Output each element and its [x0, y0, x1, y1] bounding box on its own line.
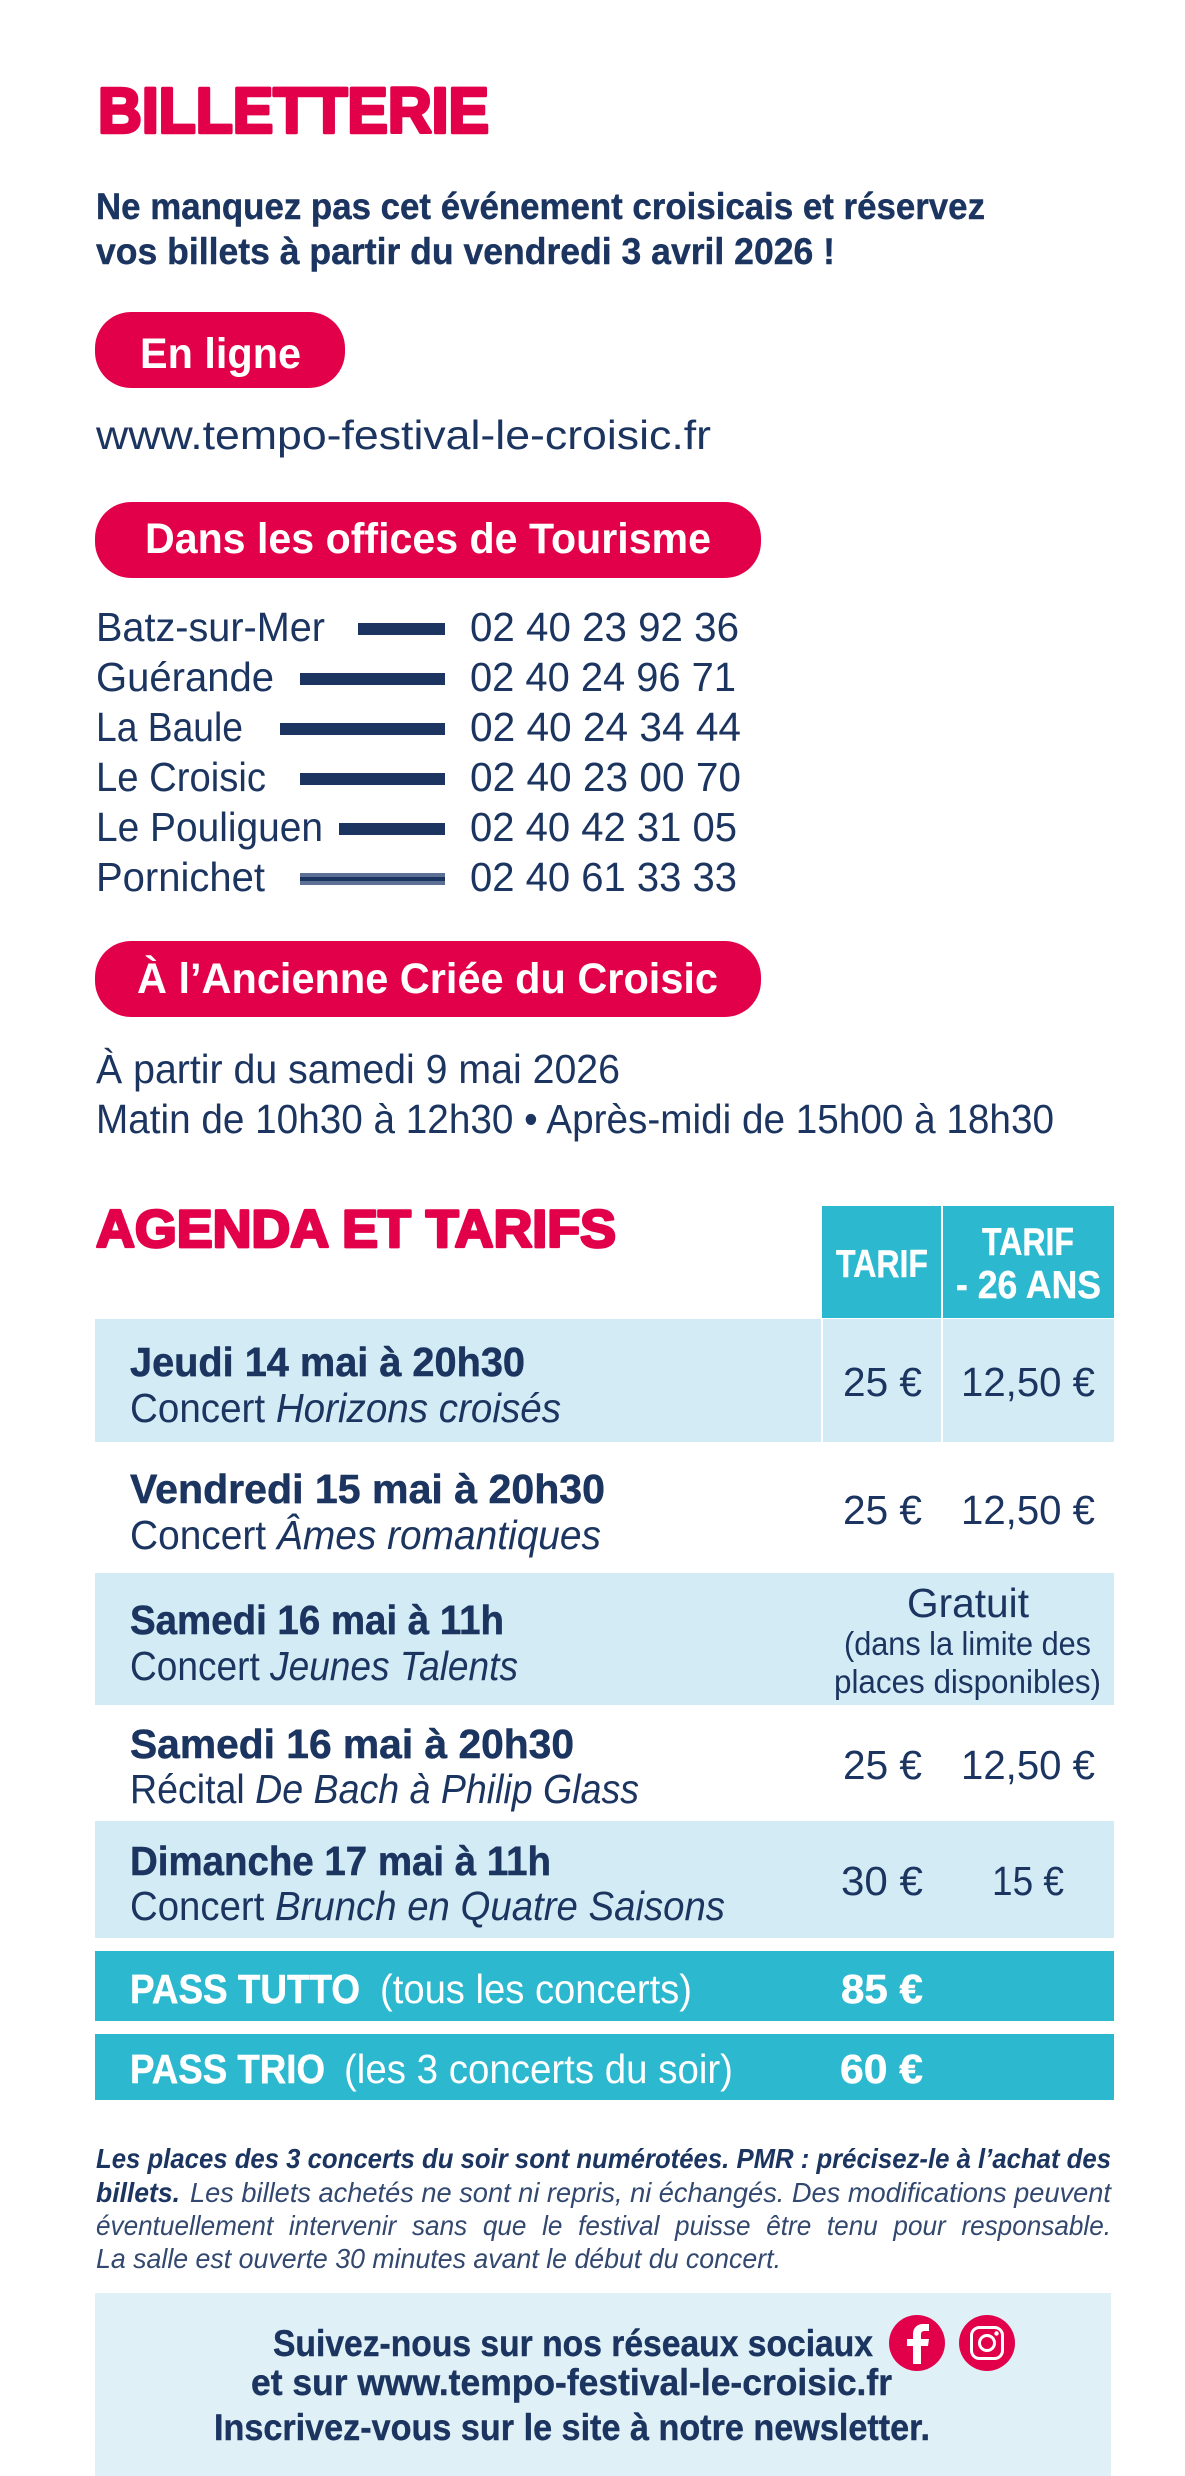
row: vendredi 15 mai: 12,50 € — [961, 1487, 1095, 1533]
list: tourist office phone numbers: Batz-sur-Mer — [96, 604, 325, 650]
list: tourist office phone numbers — [96, 604, 741, 900]
row: samedi 16 mai 11h: Samedi 16 mai à 11h — [130, 1597, 504, 1643]
intro text: vos billets à partir du vendredi 3 avril 2026 ! — [96, 231, 835, 272]
row: vendredi 15 mai: 25 € — [843, 1487, 922, 1533]
social text: Inscrivez-vous sur le site à notre newsletter. — [214, 2407, 930, 2448]
title: agenda et tarifs: AGENDA ET TARIFS — [96, 1200, 616, 1259]
pass trio: 60 € — [840, 2046, 923, 2092]
row: samedi 16 mai 11h: (dans la limite des — [844, 1625, 1091, 1662]
list: tourist office phone numbers: Le Croisic — [96, 754, 266, 800]
icon: facebook — [889, 2315, 945, 2371]
table header: tarif moins de 26 ans — [943, 1206, 1114, 1318]
row: samedi 16 mai 20h30: 25 € — [843, 1742, 922, 1788]
table header: tarif moins de 26 ans: TARIF — [982, 1221, 1074, 1264]
list: tourist office phone numbers: 02 40 24 34 44 — [470, 704, 741, 750]
list: tourist office phone numbers: La Baule — [96, 704, 243, 750]
list: tourist office phone numbers: 02 40 24 96 71 — [470, 654, 736, 700]
pill: en ligne: En ligne — [140, 330, 301, 378]
footnote: billets. — [96, 2177, 180, 2208]
list: tourist office phone numbers: Le Pouliguen — [96, 804, 323, 850]
row: jeudi 14 mai: Concert Horizons croisés — [130, 1385, 561, 1431]
row: jeudi 14 mai — [95, 1319, 1114, 1442]
footnote — [96, 2143, 1112, 2274]
row: vendredi 15 mai — [130, 1466, 1095, 1558]
row: jeudi 14 mai: 12,50 € — [961, 1359, 1095, 1405]
website url: www.tempo-festival-le-croisic.fr — [95, 412, 711, 458]
table header: tarif — [822, 1206, 941, 1318]
panel: agenda et tarifs — [95, 1200, 1114, 2100]
panel: social and newsletter — [95, 2293, 1111, 2476]
table header: tarif: TARIF — [836, 1243, 928, 1286]
footnote: Les places des 3 concerts du soir sont numérotées. PMR : précisez-le à l’achat des — [96, 2143, 1111, 2174]
row: dimanche 17 mai: 30 € — [841, 1858, 923, 1904]
list: tourist office phone numbers: 02 40 61 33 33 — [470, 854, 737, 900]
row: samedi 16 mai 20h30 — [130, 1721, 1095, 1812]
row: samedi 16 mai 20h30: 12,50 € — [961, 1742, 1095, 1788]
list: tourist office phone numbers: 02 40 23 92 36 — [470, 604, 739, 650]
list: tourist office phone numbers: Guérande — [96, 654, 274, 700]
pill: offices de tourisme: Dans les offices de Tourisme — [145, 515, 711, 563]
pass tutto — [95, 1951, 1114, 2021]
row: samedi 16 mai 11h — [95, 1573, 1114, 1705]
footnote: Les billets achetés ne sont ni repris, ni échangés. Des modifications peuvent — [190, 2177, 1112, 2208]
footnote: éventuellement intervenir sans que le festival puisse être tenu pour responsable. — [96, 2210, 1111, 2241]
icon: instagram — [959, 2315, 1015, 2371]
row: vendredi 15 mai: Concert Âmes romantiques — [130, 1512, 601, 1558]
row: jeudi 14 mai: 25 € — [843, 1359, 922, 1405]
social text: et sur www.tempo-festival-le-croisic.fr — [251, 2362, 892, 2403]
intro text — [96, 186, 985, 272]
social text — [214, 2323, 930, 2448]
row: samedi 16 mai 11h: Gratuit — [907, 1580, 1030, 1626]
opening hours — [96, 1046, 1054, 1142]
title: billetterie: BILLETTERIE — [98, 74, 489, 146]
pill: offices de tourisme — [95, 502, 761, 578]
social text: Suivez-nous sur nos réseaux sociaux — [273, 2323, 873, 2364]
row: dimanche 17 mai: 15 € — [992, 1858, 1064, 1904]
pass tutto: PASS TUTTO — [130, 1966, 360, 2012]
row: samedi 16 mai 11h: places disponibles) — [834, 1663, 1101, 1700]
row: dimanche 17 mai — [95, 1821, 1114, 1938]
row: samedi 16 mai 20h30: Récital De Bach à Philip Glass — [130, 1766, 639, 1812]
pass trio: PASS TRIO — [130, 2046, 325, 2092]
list: tourist office phone numbers: 02 40 42 31 05 — [470, 804, 737, 850]
pass trio: (les 3 concerts du soir) — [344, 2046, 733, 2092]
row: samedi 16 mai 11h: Concert Jeunes Talents — [130, 1643, 518, 1689]
row: jeudi 14 mai: Jeudi 14 mai à 20h30 — [130, 1339, 525, 1385]
list: tourist office phone numbers: 02 40 23 00 70 — [470, 754, 741, 800]
opening hours: Matin de 10h30 à 12h30 • Après-midi de 15h00 à 18h30 — [96, 1096, 1054, 1142]
table header: tarif moins de 26 ans: - 26 ANS — [956, 1264, 1101, 1307]
row: samedi 16 mai 20h30: Samedi 16 mai à 20h30 — [130, 1721, 574, 1767]
row: dimanche 17 mai: Concert Brunch en Quatre Saisons — [130, 1883, 725, 1929]
intro text: Ne manquez pas cet événement croisicais et réservez — [96, 186, 985, 227]
pill: ancienne criée: À l’Ancienne Criée du Croisic — [137, 955, 718, 1003]
row: dimanche 17 mai: Dimanche 17 mai à 11h — [130, 1838, 551, 1884]
panel: billetterie — [95, 74, 1054, 1142]
footnote: La salle est ouverte 30 minutes avant le début du concert. — [96, 2243, 781, 2274]
pass tutto: 85 € — [841, 1966, 923, 2012]
pill: en ligne — [95, 312, 345, 388]
pass tutto: (tous les concerts) — [380, 1966, 692, 2012]
opening hours: À partir du samedi 9 mai 2026 — [96, 1046, 620, 1092]
pill: ancienne criée — [95, 941, 761, 1017]
list: tourist office phone numbers: Pornichet — [96, 854, 266, 900]
row: vendredi 15 mai: Vendredi 15 mai à 20h30 — [130, 1466, 605, 1512]
pass trio — [95, 2034, 1114, 2100]
